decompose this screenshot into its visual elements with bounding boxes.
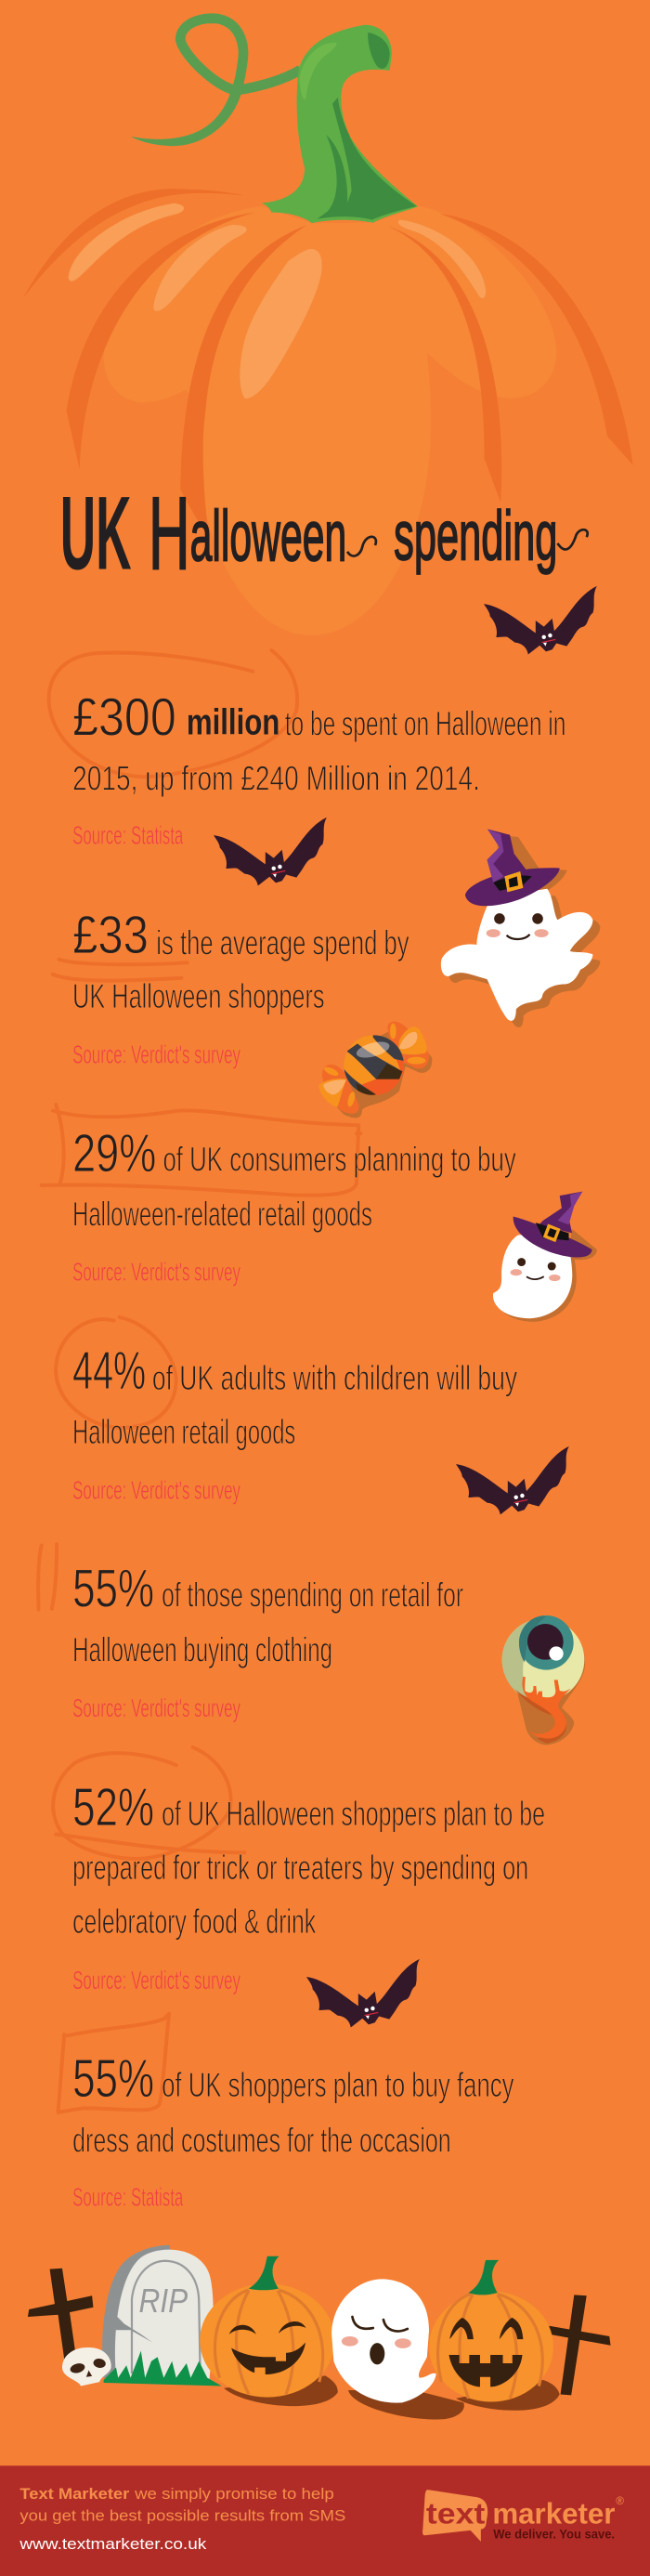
footer: you get the best possible results from SMS	[20, 2507, 345, 2525]
stat 2: £33: is the average spend by	[156, 922, 410, 961]
stat 5: 55% on clothing	[38, 1544, 463, 1722]
stat text: 44%	[72, 1341, 146, 1401]
stat 2: £33: UK Halloween shoppers	[72, 976, 325, 1015]
stat text: 52%	[72, 1778, 154, 1837]
source: Source: Statista	[72, 821, 184, 850]
icon: candy	[318, 1022, 432, 1118]
stat 1: £300 million	[49, 650, 566, 850]
title: alloween	[190, 497, 346, 577]
logo: We deliver. You save.	[493, 2527, 615, 2541]
scribble circle and underline	[53, 1747, 244, 1859]
icon: eyeball	[502, 1615, 585, 1745]
title	[60, 475, 588, 592]
logo: ®	[616, 2495, 624, 2507]
logo	[422, 2490, 624, 2542]
icon: bat 1	[484, 586, 597, 655]
source: Source: Verdict's survey	[72, 1040, 240, 1068]
graveyard scene	[28, 2245, 611, 2419]
pumpkin body	[104, 206, 556, 635]
scribble rectangle	[42, 1105, 360, 1196]
stat text: £300	[72, 688, 176, 748]
icon: pumpkin left	[200, 2256, 335, 2398]
shadows	[224, 2375, 560, 2419]
icon: ghost with witch hat	[441, 830, 600, 1027]
icon: left cross	[28, 2269, 93, 2360]
pumpkin illustration	[23, 19, 633, 635]
scribble circle	[49, 650, 297, 777]
pumpkin highlights	[69, 203, 486, 399]
stat 7: 55% on costumes: dress and costumes for the occasion	[72, 2120, 451, 2159]
stat 1: £300 million: 2015, up from £240 Million in 2014.	[72, 759, 480, 798]
logo: marketer	[492, 2498, 616, 2530]
scribble rectangle	[58, 2014, 169, 2112]
icon: tombstone: RIP	[139, 2282, 188, 2320]
icon: pumpkin right	[429, 2260, 553, 2402]
icon: bat 4	[306, 1959, 420, 2028]
icon: tombstone	[102, 2245, 222, 2386]
stat 5: 55% on clothing: Halloween buying clothing	[72, 1629, 332, 1668]
stat 2: £33	[53, 906, 410, 1068]
title: H	[149, 476, 190, 592]
icon: bat 3	[456, 1446, 569, 1515]
tendril	[131, 19, 301, 146]
source: Source: Verdict's survey	[72, 1693, 240, 1722]
stat 3: 29%	[42, 1105, 516, 1287]
stat 3: 29%: Halloween-related retail goods	[72, 1194, 372, 1233]
icon: ghost	[332, 2279, 436, 2403]
footer: we simply promise to help	[134, 2485, 334, 2503]
stat 4: 44%: Halloween retail goods	[72, 1412, 295, 1451]
stat 4: 44%	[56, 1317, 517, 1504]
scribble circle	[56, 1317, 176, 1428]
icon: bat 2	[214, 817, 327, 886]
footer: www.textmarketer.co.uk	[19, 2535, 207, 2553]
icon: small ghost with witch hat	[493, 1192, 597, 1322]
source: Source: Statista	[72, 2182, 184, 2211]
title: UK	[60, 475, 132, 592]
stat 6: 52%	[53, 1747, 545, 1941]
stem	[261, 25, 418, 223]
stat 1: £300 million: million	[187, 702, 280, 743]
scribble bars	[38, 1544, 57, 1610]
pumpkin ribs	[23, 189, 633, 539]
stat text: £33	[72, 906, 149, 965]
stat text: 29%	[72, 1124, 156, 1183]
icon: skull	[62, 2347, 111, 2386]
stat 6: 52%: celebratory food & drink	[72, 1902, 316, 1941]
source: Source: Verdict's survey	[72, 1475, 240, 1504]
footer band	[0, 2465, 650, 2576]
stat text: 55%	[72, 2049, 154, 2109]
footer	[0, 2465, 650, 2576]
stat 7: 55% on costumes	[58, 1966, 514, 2211]
stat text: 55%	[72, 1560, 154, 1619]
footer text: Text Marketer	[20, 2485, 130, 2503]
scribble underlines	[53, 960, 188, 981]
source for stat 6: Source: Verdict's survey	[72, 1966, 240, 1994]
icon: right cross	[550, 2295, 611, 2395]
logo: text	[426, 2498, 486, 2530]
source: Source: Verdict's survey	[72, 1258, 240, 1287]
stat 5: 55% on clothing: of those spending on retail for	[162, 1576, 463, 1615]
